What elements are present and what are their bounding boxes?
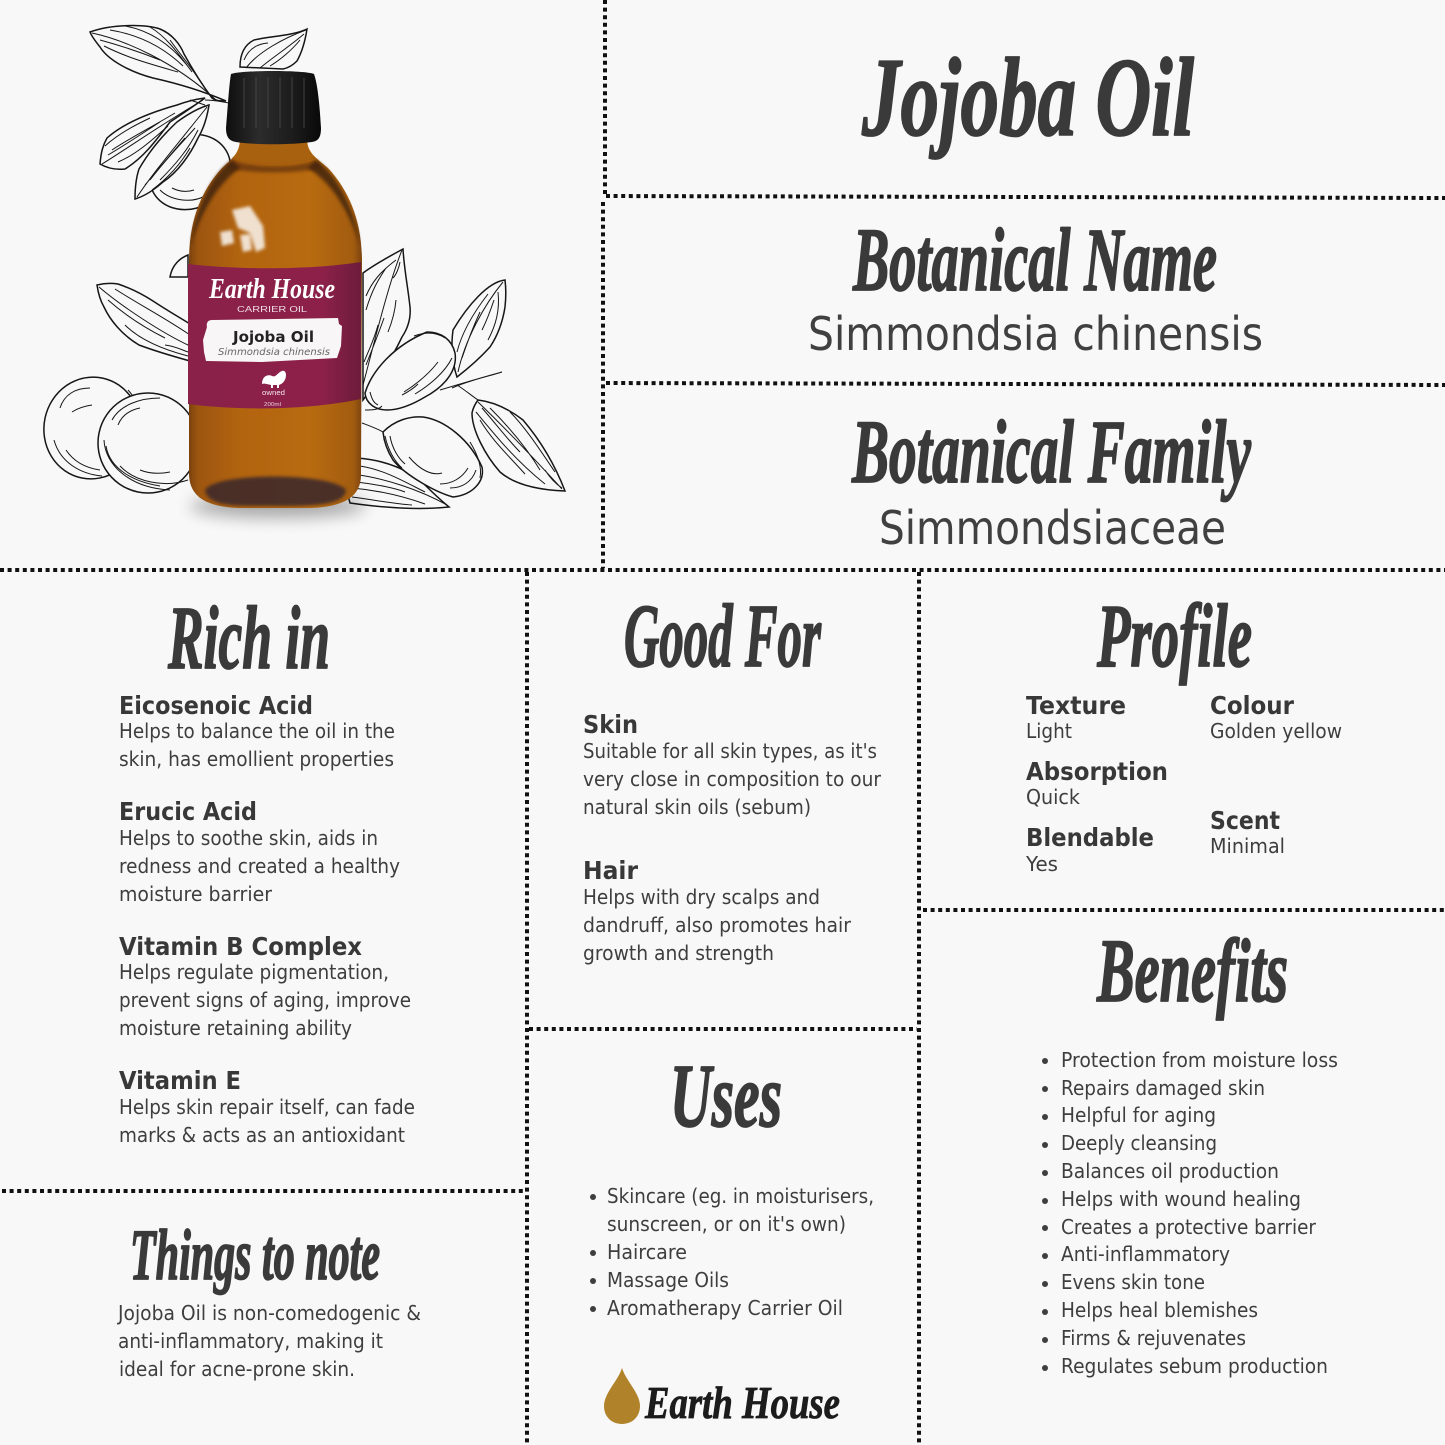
leaf: bottom right	[348, 458, 449, 508]
bottle base shadow	[205, 476, 346, 506]
list: benefits: Repairs damaged skin	[1061, 1076, 1265, 1100]
heading: good for: Good For	[624, 587, 822, 686]
item: colour: Colour	[1210, 691, 1295, 720]
label volume text: 200ml	[264, 402, 281, 408]
panel: benefits	[1042, 922, 1338, 1378]
list: uses: Skincare (eg. in moisturisers,	[607, 1184, 874, 1208]
list: benefits: Firms & rejuvenates	[1061, 1326, 1246, 1350]
item: blendable: Blendable	[1026, 823, 1154, 852]
heading: botanical name: Botanical Name	[852, 211, 1217, 310]
panel: things to note	[116, 1215, 421, 1381]
heading: uses: Uses	[670, 1047, 782, 1146]
bottle shoulder dark edge right	[308, 160, 360, 245]
stem: right branch	[362, 372, 502, 432]
item: hair	[583, 856, 852, 965]
item: skin	[583, 710, 882, 819]
bottle shadow	[190, 494, 366, 518]
item: vitamin e: Vitamin E	[119, 1066, 241, 1095]
item: skin: very close in composition to our	[583, 767, 882, 791]
text: botanical family value: Simmondsiaceae	[879, 501, 1226, 555]
logo wordmark: Earth House	[644, 1377, 840, 1428]
list: benefits: Helpful for aging	[1061, 1103, 1216, 1127]
leaf: upper left pair	[100, 98, 230, 199]
item: eicosenoic acid: skin, has emollient properties	[119, 747, 394, 771]
bottle: jojoba oil amber glass	[188, 71, 366, 518]
item: erucic acid: Erucic Acid	[119, 797, 257, 826]
list: benefits: Deeply cleansing	[1061, 1131, 1217, 1155]
label brand text: Earth House	[208, 274, 335, 305]
item: erucic acid: Helps to soothe skin, aids in	[119, 826, 378, 850]
item: skin: natural skin oils (sebum)	[583, 795, 811, 819]
label white brush panel	[203, 318, 342, 362]
list: benefits	[1042, 1048, 1338, 1378]
leaf: small behind bottle	[170, 255, 188, 277]
item: erucic acid: moisture barrier	[119, 882, 273, 906]
item: scent	[1210, 806, 1285, 858]
list: benefits: Protection from moisture loss	[1061, 1048, 1338, 1072]
cap	[226, 71, 321, 144]
illustration: jojoba leaves and nuts line art	[34, 26, 565, 508]
leaf: lower far right	[472, 400, 565, 491]
item: vitamin b complex: Helps regulate pigmentation,	[119, 960, 389, 984]
list: uses: Massage Oils	[607, 1268, 729, 1292]
item: hair: Helps with dry scalps and	[583, 885, 820, 909]
list: uses: Aromatherapy Carrier Oil	[607, 1296, 843, 1320]
panel: botanical family	[851, 403, 1252, 555]
item: colour: Golden yellow	[1210, 719, 1342, 743]
item: hair: growth and strength	[583, 941, 774, 965]
item: vitamin b complex: prevent signs of aging, improve	[119, 988, 411, 1012]
nut: right lower	[383, 417, 482, 497]
panel: botanical name	[808, 211, 1263, 361]
item: absorption: Quick	[1026, 785, 1080, 809]
item: blendable: Yes	[1025, 852, 1058, 876]
leaf: right upper	[363, 249, 410, 400]
nut: right upper	[365, 332, 455, 410]
title: Jojoba Oil: Jojoba Oil	[861, 36, 1194, 160]
item: absorption	[1026, 757, 1168, 809]
heading: rich in: Rich in	[167, 589, 330, 688]
item: erucic acid: redness and created a healthy	[119, 854, 400, 878]
nut: behind upper left leaves	[136, 120, 244, 224]
nut: lower left front	[90, 385, 206, 501]
icon: kiwi	[262, 371, 286, 388]
panel: profile	[1025, 587, 1342, 876]
list: uses	[590, 1184, 874, 1320]
heading: things to note: Things to note	[130, 1215, 380, 1295]
list: benefits: Anti-inflammatory	[1061, 1242, 1230, 1266]
item: scent: Minimal	[1210, 834, 1285, 858]
heading: benefits: Benefits	[1096, 922, 1288, 1021]
list: benefits: Regulates sebum production	[1061, 1354, 1328, 1378]
item: vitamin e	[119, 1066, 415, 1147]
item: vitamin e: Helps skin repair itself, can fade	[119, 1095, 415, 1119]
item: vitamin b complex: moisture retaining ability	[119, 1016, 352, 1040]
item: skin: Suitable for all skin types, as it's	[583, 739, 877, 763]
label product name: Jojoba Oil	[232, 328, 314, 346]
item: scent: Scent	[1210, 806, 1280, 835]
logo: Earth House	[604, 1368, 840, 1428]
item: erucic acid	[119, 797, 400, 906]
label owned text: owned	[262, 388, 285, 397]
item: skin: Skin	[583, 710, 638, 739]
list: benefits: Helps with wound healing	[1061, 1187, 1301, 1211]
bottle shoulder band	[226, 160, 322, 172]
item: blendable	[1025, 823, 1154, 876]
item: texture: Texture	[1026, 691, 1126, 720]
nut: lower left back	[34, 368, 150, 488]
label	[188, 262, 361, 408]
list: benefits: Evens skin tone	[1061, 1270, 1205, 1294]
item: absorption: Absorption	[1026, 757, 1168, 786]
text: note body: Jojoba Oil is non-comedogenic &	[116, 1301, 421, 1325]
text: note body: ideal for acne-prone skin.	[119, 1357, 355, 1381]
list: benefits: Helps heal blemishes	[1061, 1298, 1258, 1322]
panel: uses	[590, 1047, 874, 1320]
leaf: middle left	[97, 283, 190, 361]
label carrier oil text: CARRIER OIL	[237, 305, 308, 314]
glass body	[189, 140, 362, 508]
item: hair: dandruff, also promotes hair	[583, 913, 852, 937]
item: vitamin b complex: Vitamin B Complex	[119, 932, 362, 961]
glass reflections	[220, 206, 265, 252]
text: note body: anti-inflammatory, making it	[118, 1329, 383, 1353]
item: texture: Light	[1026, 719, 1072, 743]
icon: gold oil drop	[604, 1368, 640, 1424]
item: colour	[1210, 691, 1342, 743]
leaf: far right	[452, 280, 506, 377]
panel: rich in	[119, 589, 415, 1147]
item: vitamin e: marks & acts as an antioxidant	[119, 1123, 405, 1147]
label botanical name: Simmondsia chinensis	[218, 347, 330, 358]
list: benefits: Balances oil production	[1061, 1159, 1279, 1183]
panel: good for	[583, 587, 882, 965]
item: vitamin b complex	[119, 932, 411, 1040]
leaf: top centre	[240, 29, 307, 69]
list: benefits: Creates a protective barrier	[1061, 1215, 1317, 1239]
item: texture	[1026, 691, 1126, 743]
cap ribs	[244, 77, 304, 128]
item: eicosenoic acid: Eicosenoic Acid	[119, 691, 313, 720]
text: botanical name value: Simmondsia chinensis	[808, 307, 1263, 361]
text: note body	[116, 1301, 421, 1381]
bottle neck glow	[232, 142, 316, 164]
bottle shoulder dark edge left	[191, 160, 240, 245]
list: uses: Haircare	[607, 1240, 687, 1264]
item: eicosenoic acid	[119, 691, 395, 771]
heading: profile: Profile	[1096, 587, 1252, 686]
item: eicosenoic acid: Helps to balance the oil in the	[119, 719, 395, 743]
list: uses: sunscreen, or on it's own)	[607, 1212, 846, 1236]
leaf: top left	[90, 26, 226, 101]
item: hair: Hair	[583, 856, 639, 885]
